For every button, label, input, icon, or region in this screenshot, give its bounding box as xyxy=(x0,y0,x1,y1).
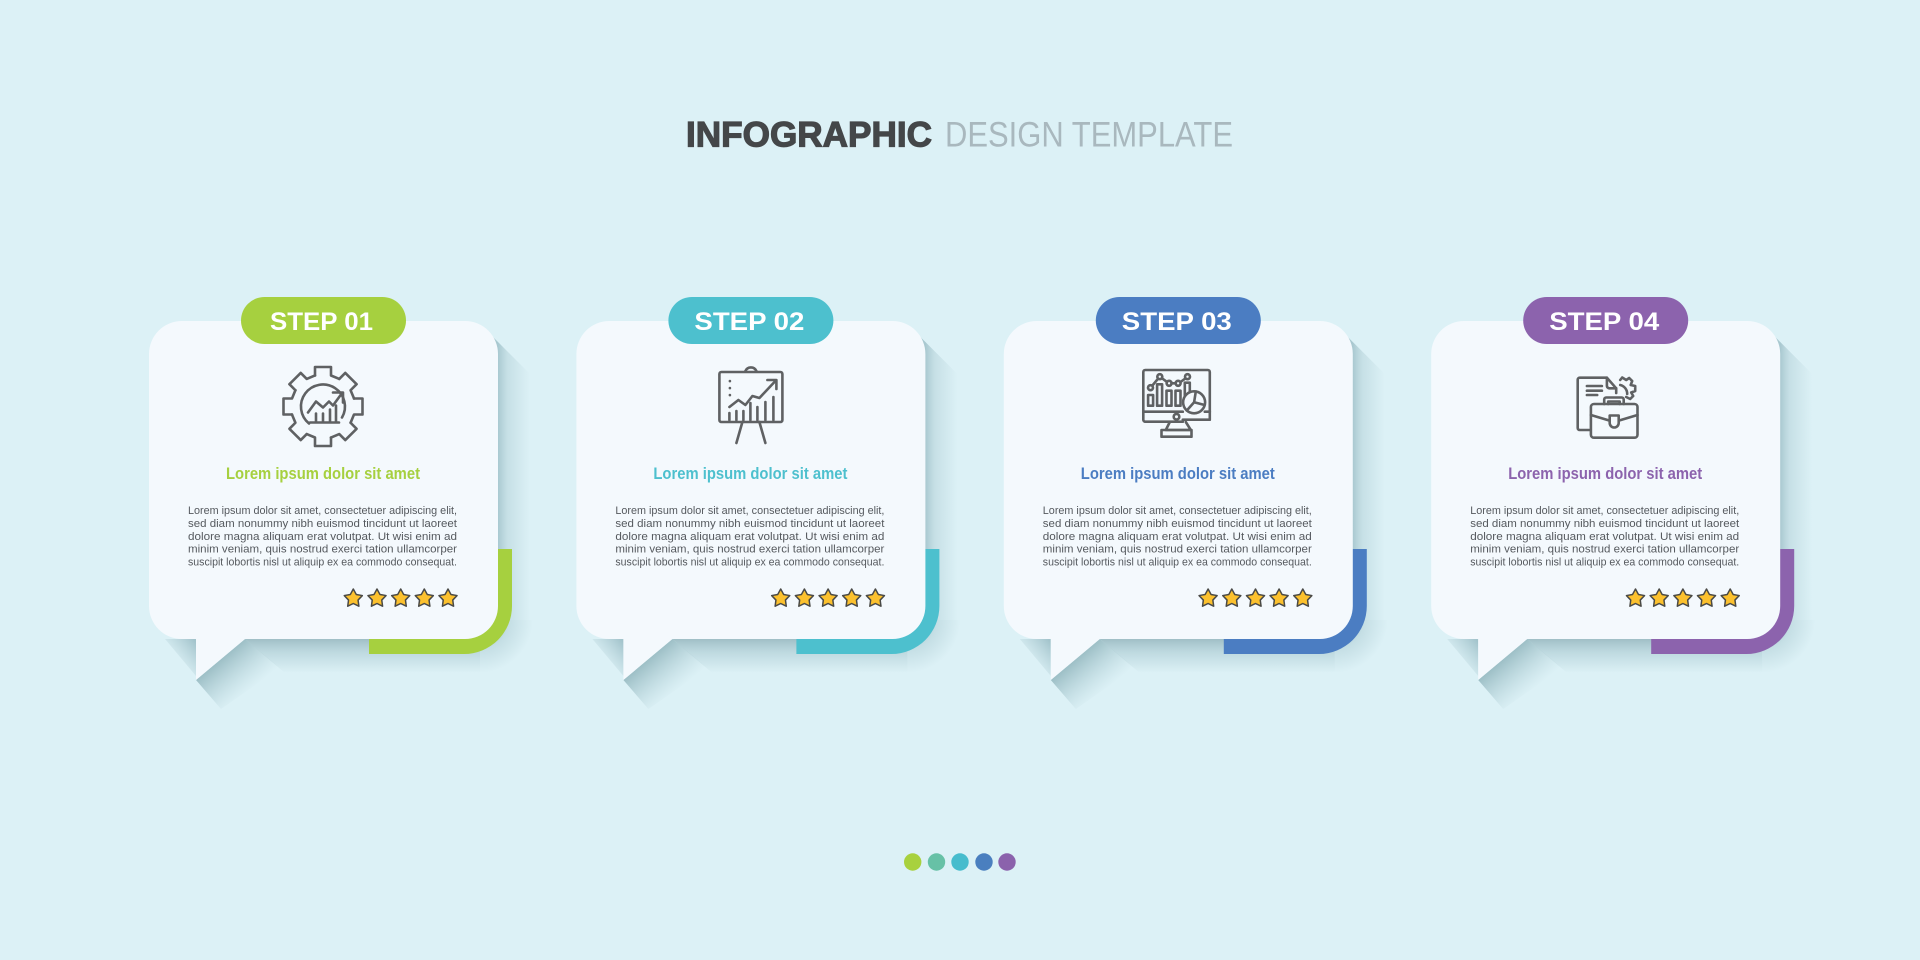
accent corner xyxy=(1224,549,1367,654)
body text: dolore magna aliquam erat volutpat. Ut wisi enim ad xyxy=(1470,531,1739,543)
panel: step 01 xyxy=(149,297,533,709)
title xyxy=(686,116,1233,154)
step badge: STEP 01 xyxy=(270,308,373,336)
heading: Lorem ipsum dolor sit amet xyxy=(1081,465,1275,483)
body text: sed diam nonummy nibh euismod tincidunt ut laoreet xyxy=(1470,518,1739,530)
step badge xyxy=(1096,297,1261,344)
body text: sed diam nonummy nibh euismod tincidunt ut laoreet xyxy=(1043,518,1312,530)
body text: sed diam nonummy nibh euismod tincidunt ut laoreet xyxy=(188,518,457,530)
body text: minim veniam, quis nostrud exerci tation ullamcorper xyxy=(1470,544,1740,556)
speech bubble card xyxy=(576,321,925,680)
body text: suscipit lobortis nisl ut aliquip ex ea commodo consequat. xyxy=(615,556,884,568)
body text xyxy=(615,505,885,568)
title: INFOGRAPHIC xyxy=(686,116,932,154)
accent corner xyxy=(369,549,512,654)
pagination dots xyxy=(904,853,1016,871)
body text xyxy=(188,505,457,568)
body text: dolore magna aliquam erat volutpat. Ut wisi enim ad xyxy=(615,531,884,543)
body text: minim veniam, quis nostrud exerci tation ullamcorper xyxy=(615,544,885,556)
step badge: STEP 04 xyxy=(1549,308,1659,336)
body text: dolore magna aliquam erat volutpat. Ut wisi enim ad xyxy=(1043,531,1312,543)
body text: Lorem ipsum dolor sit amet, consectetuer adipiscing elit, xyxy=(1470,505,1739,517)
panel: step 04 xyxy=(1431,297,1815,709)
heading: Lorem ipsum dolor sit amet xyxy=(226,465,420,483)
step badge xyxy=(241,297,406,344)
panel: step 03 xyxy=(1004,297,1388,709)
body text: Lorem ipsum dolor sit amet, consectetuer adipiscing elit, xyxy=(1043,505,1312,517)
body text: minim veniam, quis nostrud exerci tation ullamcorper xyxy=(1043,544,1312,556)
body text: sed diam nonummy nibh euismod tincidunt ut laoreet xyxy=(615,518,884,530)
card shadow xyxy=(165,336,533,709)
icon: monitor with charts xyxy=(1143,370,1210,437)
body text: minim veniam, quis nostrud exerci tation ullamcorper xyxy=(188,544,457,556)
icon: document, gear and briefcase xyxy=(1578,378,1638,438)
body text: Lorem ipsum dolor sit amet, consectetuer adipiscing elit, xyxy=(615,505,884,517)
card shadow xyxy=(1020,336,1388,709)
body text: dolore magna aliquam erat volutpat. Ut wisi enim ad xyxy=(188,531,457,543)
accent corner xyxy=(1651,549,1794,654)
icon: gear with growth chart xyxy=(284,367,362,446)
heading: Lorem ipsum dolor sit amet xyxy=(1508,465,1703,483)
step badge xyxy=(668,297,833,344)
accent corner xyxy=(796,549,939,654)
star rating xyxy=(344,589,457,606)
panel: step 02 xyxy=(576,297,960,709)
body text xyxy=(1470,505,1740,568)
step badge: STEP 02 xyxy=(694,308,804,336)
step badge: STEP 03 xyxy=(1122,308,1232,336)
body text: suscipit lobortis nisl ut aliquip ex ea commodo consequat. xyxy=(1470,556,1739,568)
star rating xyxy=(1199,589,1312,606)
body text xyxy=(1043,505,1312,568)
body text: suscipit lobortis nisl ut aliquip ex ea commodo consequat. xyxy=(188,556,457,568)
star rating xyxy=(1626,589,1739,606)
card shadow xyxy=(592,336,960,709)
speech bubble card xyxy=(1004,321,1353,680)
speech bubble card xyxy=(1431,321,1780,680)
heading: Lorem ipsum dolor sit amet xyxy=(653,465,848,483)
step badge xyxy=(1523,297,1688,344)
body text: Lorem ipsum dolor sit amet, consectetuer adipiscing elit, xyxy=(188,505,457,517)
body text: suscipit lobortis nisl ut aliquip ex ea commodo consequat. xyxy=(1043,556,1312,568)
title: DESIGN TEMPLATE xyxy=(945,116,1233,154)
speech bubble card xyxy=(149,321,498,680)
card shadow xyxy=(1447,336,1815,709)
icon: presentation board xyxy=(719,367,782,443)
star rating xyxy=(772,589,884,606)
